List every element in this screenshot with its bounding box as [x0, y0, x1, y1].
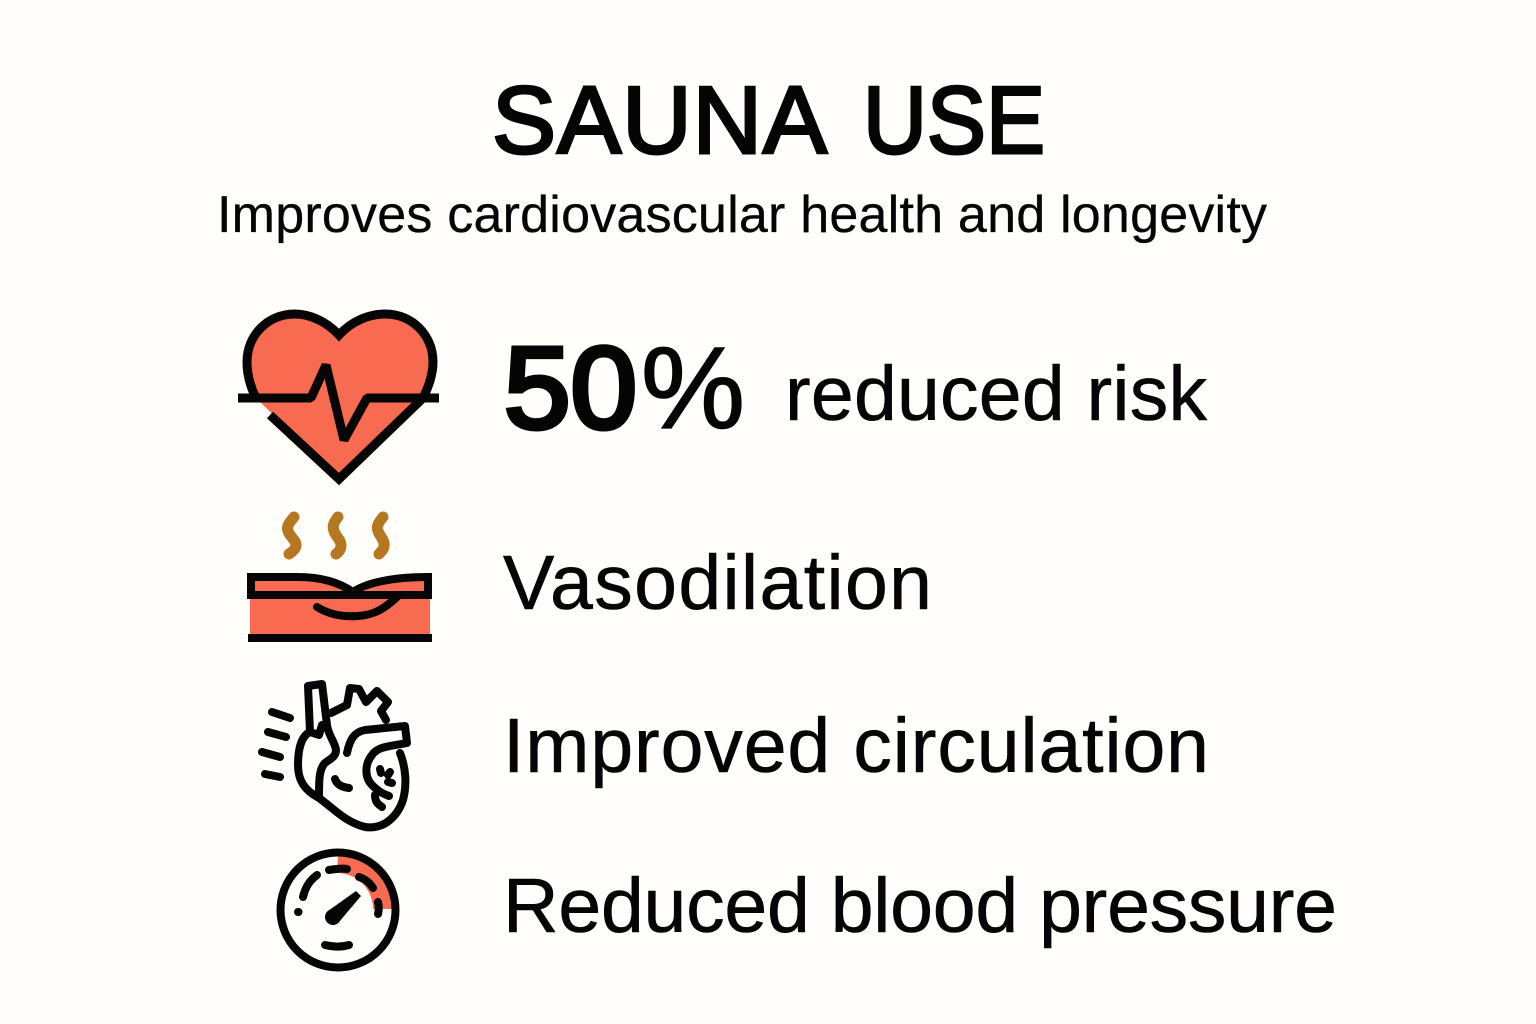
icon: vasodilation vessel with steam: [247, 517, 432, 638]
title: SAUNA: [492, 67, 827, 174]
subtitle: Improves cardiovascular health and longevity: [217, 186, 1267, 244]
Reduced blood pressure label: Reduced blood pressure: [503, 863, 1337, 949]
Improved circulation label: Improved circulation: [503, 703, 1209, 789]
steam waves: [287, 517, 384, 554]
50% statistic: %: [641, 323, 745, 453]
vessel body: [250, 597, 430, 635]
reduced risk label: reduced risk: [785, 351, 1208, 437]
icon: heart with pulse: [238, 314, 439, 479]
icon: blood pressure gauge: [280, 852, 396, 968]
icon: anatomical heart: [262, 684, 407, 827]
50% statistic: 50: [504, 323, 637, 453]
Vasodilation label: Vasodilation: [503, 540, 932, 626]
title: USE: [863, 67, 1045, 174]
